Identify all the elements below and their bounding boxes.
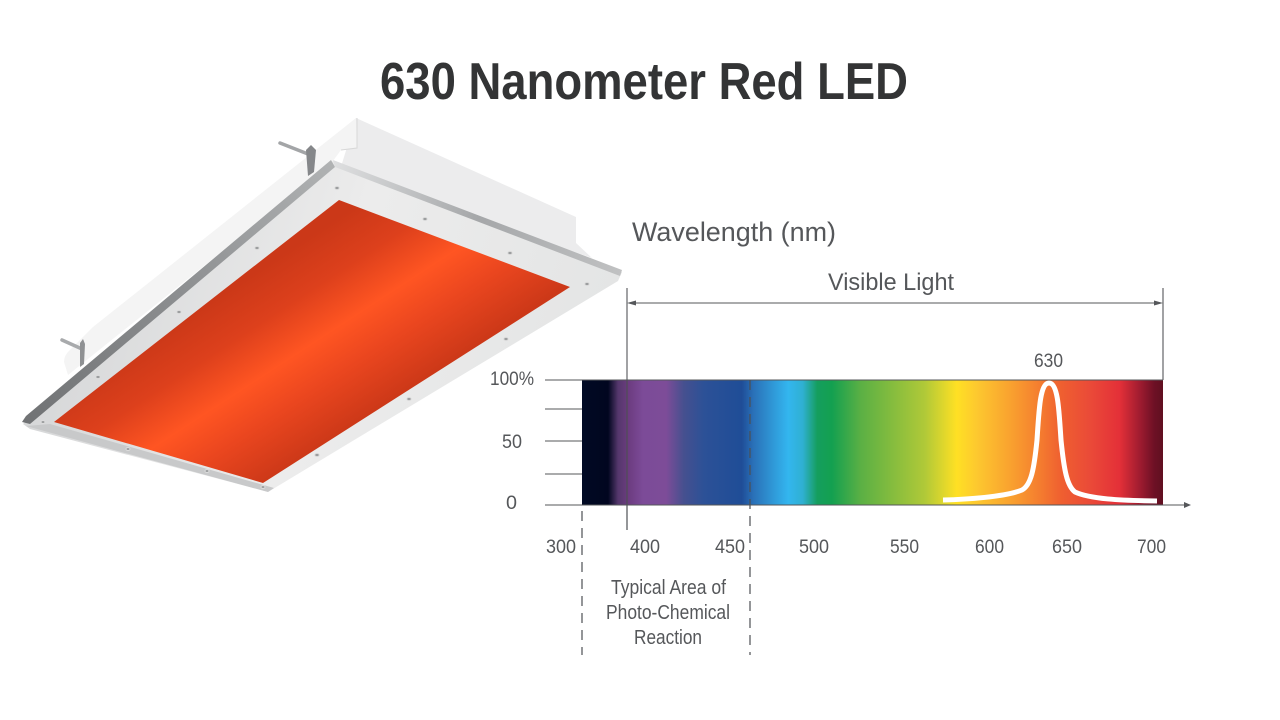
emission peak curve [943, 383, 1157, 501]
x axis labels: 300 [546, 537, 576, 558]
x axis arrow [582, 502, 1191, 508]
visible light start marker line over spectrum [626, 380, 628, 530]
metal frame [23, 161, 622, 492]
peak label: 630 [1034, 351, 1063, 372]
x axis labels: 600 [975, 537, 1004, 558]
spectrum bar [582, 380, 1163, 505]
LED light fixture illustration [22, 118, 622, 492]
x axis labels: 700 [1137, 537, 1166, 558]
x axis labels [546, 537, 1166, 558]
chart heading: wavelength: Wavelength (nm) [632, 217, 836, 247]
screws [41, 186, 589, 488]
title: 630 Nanometer Red LED [380, 53, 908, 111]
visible light range arrow [627, 269, 1163, 530]
x axis labels: 400 [630, 537, 660, 558]
bracket: upper [280, 143, 316, 176]
photo-chemical reaction caption: Reaction [634, 627, 702, 649]
bracket: lower [62, 339, 85, 367]
red LED panel [54, 200, 570, 483]
x axis labels: 450 [715, 537, 745, 558]
photo-chemical reaction caption: Photo-Chemical [606, 602, 730, 624]
y axis ticks and labels: 100% [490, 369, 534, 390]
dashed bounds of photo-chemical area [582, 380, 750, 655]
housing [340, 118, 592, 258]
x axis labels: 650 [1052, 537, 1082, 558]
visible light range arrow: Visible Light [828, 269, 954, 296]
y axis ticks and labels [490, 369, 1163, 514]
photo-chemical reaction caption [606, 577, 730, 649]
x axis labels: 550 [890, 537, 919, 558]
frame rails [22, 160, 622, 492]
y axis ticks and labels: 0 [506, 493, 517, 514]
x axis labels: 500 [799, 537, 829, 558]
photo-chemical reaction caption: Typical Area of [611, 577, 726, 599]
y axis ticks and labels: 50 [502, 432, 522, 453]
